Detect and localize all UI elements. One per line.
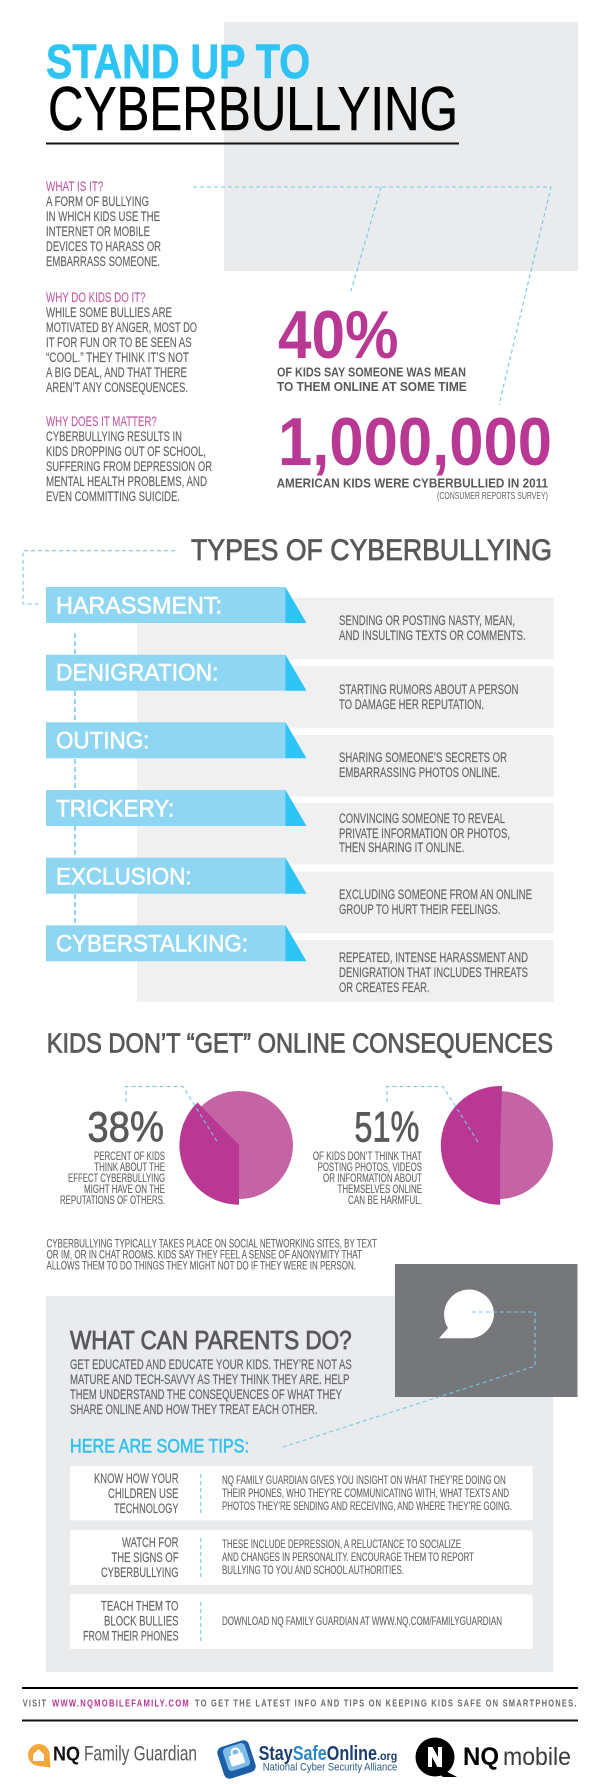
text block: why do kids do it: “COOL.” THEY THINK IT’S NOT (46, 350, 189, 365)
tip: watch for the signs: CYBERBULLYING (101, 1565, 178, 1580)
grey header panel (224, 22, 578, 271)
text block: why does it matter: MENTAL HEALTH PROBLEMS, AND (46, 474, 207, 489)
type: trickery: PRIVATE INFORMATION OR PHOTOS, (339, 826, 510, 841)
text block: where cyberbullying happens: OR IM, OR IN CHAT ROOMS. KIDS SAY THEY FEEL A SENSE OF ANONYMITY THAT (46, 1249, 362, 1261)
tip: teach them to block bullies: TEACH THEM TO (101, 1599, 178, 1614)
statistic: 1,000,000: AMERICAN KIDS WERE CYBERBULLIED IN 2011 (277, 477, 548, 491)
tip: watch for the signs: BULLYING TO YOU AND SCHOOL AUTHORITIES. (222, 1565, 404, 1577)
tip: know how your children use technology: TECHNOLOGY (114, 1501, 179, 1516)
logo: NQ Family Guardian: Family Guardian (84, 1743, 197, 1766)
tip: watch for the signs: THESE INCLUDE DEPRESSION, A RELUCTANCE TO SOCIALIZE (222, 1539, 461, 1551)
text block: what is it: WHAT IS IT? (46, 179, 103, 194)
connector dashes: speech bubble to tips (280, 1312, 535, 1448)
statistic: 1,000,000: (CONSUMER REPORTS SURVEY) (437, 491, 548, 502)
statistic: 38%: 38% (87, 1104, 164, 1152)
pie chart: 38% (126, 1086, 293, 1205)
type: harassment: HARASSMENT: (56, 592, 222, 619)
type: outing: SHARING SOMEONE’S SECRETS OR (339, 750, 507, 765)
statistic: 38%: MIGHT HAVE ON THE (84, 1184, 165, 1196)
heading: types of cyberbullying: TYPES OF CYBERBULLYING (191, 534, 552, 567)
footer call to action (22, 1687, 578, 1722)
text block: what is it: EMBARRASS SOMEONE. (46, 254, 160, 269)
text block: why does it matter: KIDS DROPPING OUT OF SCHOOL, (46, 444, 206, 459)
statistic: 40%: 40% (278, 297, 398, 373)
type: cyberstalking: CYBERSTALKING: (56, 931, 248, 958)
text block: why does it matter: EVEN COMMITTING SUICIDE. (46, 489, 180, 504)
connector dashes: header (193, 187, 551, 405)
type: harassment (46, 587, 554, 659)
text block: where cyberbullying happens (46, 1238, 377, 1272)
text block: why do kids do it: A BIG DEAL, AND THAT THERE (46, 365, 187, 380)
dark panel with speech bubble (395, 1264, 578, 1397)
type: harassment: AND INSULTING TEXTS OR COMMENTS. (339, 628, 526, 643)
text block: parents advice: GET EDUCATED AND EDUCATE YOUR KIDS. THEY’RE NOT AS (70, 1357, 352, 1372)
tip: watch for the signs (70, 1530, 533, 1585)
type: trickery: CONVINCING SOMEONE TO REVEAL (339, 811, 505, 826)
logo: StaySafeOnline: National Cyber Security Alliance (263, 1762, 397, 1774)
statistic: 51%: POSTING PHOTOS, VIDEOS (318, 1162, 422, 1174)
icon: blue lock key (216, 1739, 257, 1780)
tip: watch for the signs: WATCH FOR (122, 1535, 179, 1550)
text block: parents advice: SHARE ONLINE AND HOW THEY TREAT EACH OTHER. (70, 1402, 318, 1417)
type: exclusion: EXCLUSION: (56, 863, 192, 890)
statistic: 51%: OR INFORMATION ABOUT (323, 1173, 422, 1185)
type: trickery: THEN SHARING IT ONLINE. (339, 840, 464, 855)
type: denigration: STARTING RUMORS ABOUT A PERSON (339, 682, 518, 697)
type: denigration: DENIGRATION: (56, 660, 218, 687)
tip: know how your children use technology: CHILDREN USE (108, 1486, 179, 1501)
logo: NQ Family Guardian: NQ (53, 1744, 80, 1766)
title: CYBERBULLYING (48, 75, 458, 144)
logo: StaySafeOnline: StaySafeOnline (259, 1743, 377, 1765)
icon: black N bubble (416, 1738, 457, 1777)
statistic: 40%: TO THEM ONLINE AT SOME TIME (277, 380, 467, 394)
type: denigration: TO DAMAGE HER REPUTATION. (339, 697, 484, 712)
type: cyberstalking: OR CREATES FEAR. (339, 980, 430, 995)
type: exclusion (46, 858, 554, 933)
logo: NQ mobile: mobile (503, 1743, 571, 1771)
logo: NQ Family Guardian (28, 1743, 197, 1768)
statistic: 38%: EFFECT CYBERBULLYING (68, 1173, 165, 1185)
vertical dashes between banners (74, 633, 76, 925)
title (46, 36, 459, 144)
text block: why do kids do it (46, 290, 197, 395)
text block: what is it (46, 179, 161, 269)
tip: teach them to block bullies (70, 1594, 533, 1649)
type: denigration (46, 655, 554, 728)
statistic: 38%: THINK ABOUT THE (94, 1162, 165, 1174)
statistic: 51%: CAN BE HARMFUL. (348, 1195, 422, 1207)
text block: why does it matter (46, 414, 212, 504)
text block: why does it matter: SUFFERING FROM DEPRESSION OR (46, 459, 212, 474)
icon: orange house bubble (28, 1744, 50, 1768)
statistic: 1,000,000: 1,000,000 (278, 404, 552, 480)
type: exclusion: EXCLUDING SOMEONE FROM AN ONLINE (339, 887, 532, 902)
text block: why do kids do it: WHY DO KIDS DO IT? (46, 290, 146, 305)
type: outing: OUTING: (56, 727, 149, 754)
pie chart: 51% (387, 1086, 553, 1205)
text block: what is it: INTERNET OR MOBILE (46, 224, 150, 239)
type: outing: EMBARRASSING PHOTOS ONLINE. (339, 765, 500, 780)
tip: watch for the signs: AND CHANGES IN PERSONALITY. ENCOURAGE THEM TO REPORT (222, 1552, 474, 1564)
text block: why do kids do it: MOTIVATED BY ANGER, MOST DO (46, 320, 197, 335)
text block: what is it: IN WHICH KIDS USE THE (46, 209, 160, 224)
text block: why do kids do it: AREN’T ANY CONSEQUENCES. (46, 380, 188, 395)
logo: StaySafeOnline (216, 1739, 397, 1780)
statistic: 38% (60, 1104, 165, 1207)
heading: tips: HERE ARE SOME TIPS: (70, 1436, 249, 1458)
footer call to action: WWW.NQMOBILEFAMILY.COM (52, 1698, 190, 1710)
logo: NQ mobile (416, 1738, 571, 1777)
text block: parents advice: THEM UNDERSTAND THE CONSEQUENCES OF WHAT THEY (70, 1387, 342, 1402)
text block: where cyberbullying happens: CYBERBULLYING TYPICALLY TAKES PLACE ON SOCIAL NETWORKING SITES, BY TEXT (46, 1238, 377, 1250)
tip: know how your children use technology: KNOW HOW YOUR (94, 1471, 179, 1486)
logo: StaySafeOnline: .org (377, 1749, 397, 1763)
type: cyberstalking: REPEATED, INTENSE HARASSMENT AND (339, 950, 528, 965)
type: trickery: TRICKERY: (56, 796, 174, 823)
panel: what can parents do (46, 1296, 553, 1672)
text block: why does it matter: WHY DOES IT MATTER? (46, 414, 157, 429)
type: harassment: SENDING OR POSTING NASTY, MEAN, (339, 613, 515, 628)
connector dashes: types (23, 551, 175, 604)
text block: why does it matter: CYBERBULLYING RESULTS IN (46, 429, 182, 444)
text block: why do kids do it: IT FOR FUN OR TO BE SEEN AS (46, 335, 192, 350)
text block: why do kids do it: WHILE SOME BULLIES ARE (46, 305, 172, 320)
statistic: 51%: THEMSELVES ONLINE (338, 1184, 422, 1196)
text block: what is it: DEVICES TO HARASS OR (46, 239, 161, 254)
statistic: 51%: 51% (354, 1104, 419, 1152)
tip: know how your children use technology (70, 1466, 533, 1520)
type: cyberstalking (46, 925, 554, 1002)
statistic: 40%: OF KIDS SAY SOMEONE WAS MEAN (277, 366, 466, 380)
text block: where cyberbullying happens: ALLOWS THEM TO DO THINGS THEY MIGHT NOT DO IF THEY WERE IN PERSON. (46, 1260, 356, 1272)
text block: parents advice: MATURE AND TECH-SAVVY AS THEY THINK THEY ARE. HELP (70, 1372, 349, 1387)
footer call to action: VISIT (23, 1698, 47, 1710)
logo: NQ mobile: NQ (463, 1743, 499, 1771)
heading: what can parents do: WHAT CAN PARENTS DO? (70, 1327, 352, 1355)
icon: speech bubble (439, 1290, 494, 1338)
tip: watch for the signs: THE SIGNS OF (112, 1550, 178, 1565)
statistic: 38%: PERCENT OF KIDS (94, 1151, 165, 1163)
statistic: 51% (313, 1104, 422, 1207)
type: cyberstalking: DENIGRATION THAT INCLUDES THREATS (339, 965, 528, 980)
type: exclusion: GROUP TO HURT THEIR FEELINGS. (339, 902, 500, 917)
statistic: 38%: REPUTATIONS OF OTHERS. (60, 1195, 165, 1207)
tip: teach them to block bullies: FROM THEIR PHONES (83, 1629, 179, 1644)
type: trickery (46, 790, 554, 864)
title: STAND UP TO (46, 36, 310, 89)
statistic: 51%: OF KIDS DON’T THINK THAT (313, 1151, 422, 1163)
statistic: 40% (277, 297, 467, 394)
type: outing (46, 722, 554, 796)
tip: teach them to block bullies: BLOCK BULLIES (104, 1614, 179, 1629)
text block: parents advice (70, 1357, 352, 1417)
text block: what is it: A FORM OF BULLYING (46, 194, 149, 209)
